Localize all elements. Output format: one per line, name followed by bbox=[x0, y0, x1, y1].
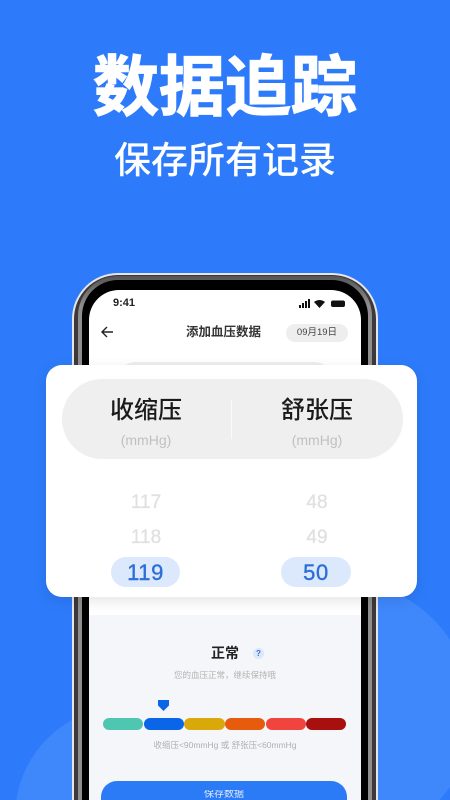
phone black bezel bbox=[82, 280, 368, 800]
selected diastolic: 50 bbox=[303, 560, 329, 585]
phone screen bbox=[89, 290, 361, 800]
date pill: 09月19日 bbox=[297, 327, 337, 338]
scale bar bbox=[103, 700, 346, 730]
scale segments bbox=[103, 718, 346, 730]
divider bbox=[231, 400, 232, 439]
back arrow bbox=[101, 326, 113, 338]
status note: 您的血压正常，继续保持哦 bbox=[174, 670, 276, 680]
diastolic values bbox=[306, 492, 328, 548]
subtitle: 保存所有记录 bbox=[114, 140, 336, 181]
status time: 9:41 bbox=[113, 297, 135, 309]
screen title: 添加血压数据 bbox=[186, 325, 261, 339]
hidden gray header bbox=[116, 362, 334, 402]
save button bbox=[101, 781, 347, 800]
diastolic heading: 舒张压 bbox=[281, 397, 353, 424]
systolic unit: (mmHg) bbox=[121, 432, 171, 448]
selected systolic: 119 bbox=[127, 560, 164, 585]
selected systolic bbox=[111, 557, 180, 587]
header pill bbox=[62, 379, 403, 459]
date pill bbox=[286, 324, 348, 342]
phone frame bbox=[72, 273, 378, 800]
help icon bbox=[253, 648, 264, 659]
help icon: ? bbox=[256, 649, 261, 658]
status label: 正常 bbox=[211, 645, 239, 661]
lower gray section bbox=[89, 615, 361, 800]
systolic heading: 收缩压 bbox=[110, 397, 182, 424]
diastolic unit: (mmHg) bbox=[292, 432, 342, 448]
phone gray band bbox=[78, 276, 372, 800]
systolic values: 117 bbox=[131, 492, 161, 513]
systolic values bbox=[131, 492, 161, 548]
phone dark rim bbox=[74, 274, 376, 800]
selected diastolic bbox=[281, 557, 351, 587]
diastolic values: 49 bbox=[306, 527, 328, 548]
status icons bbox=[299, 299, 345, 308]
title: 数据追踪 bbox=[93, 50, 357, 124]
scale note: 收缩压<90mmHg 或 舒张压<60mmHg bbox=[153, 740, 297, 750]
systolic values: 118 bbox=[131, 527, 161, 548]
panel: floating picker card bbox=[46, 365, 417, 597]
marker bbox=[158, 700, 169, 711]
diastolic values: 48 bbox=[306, 492, 328, 513]
